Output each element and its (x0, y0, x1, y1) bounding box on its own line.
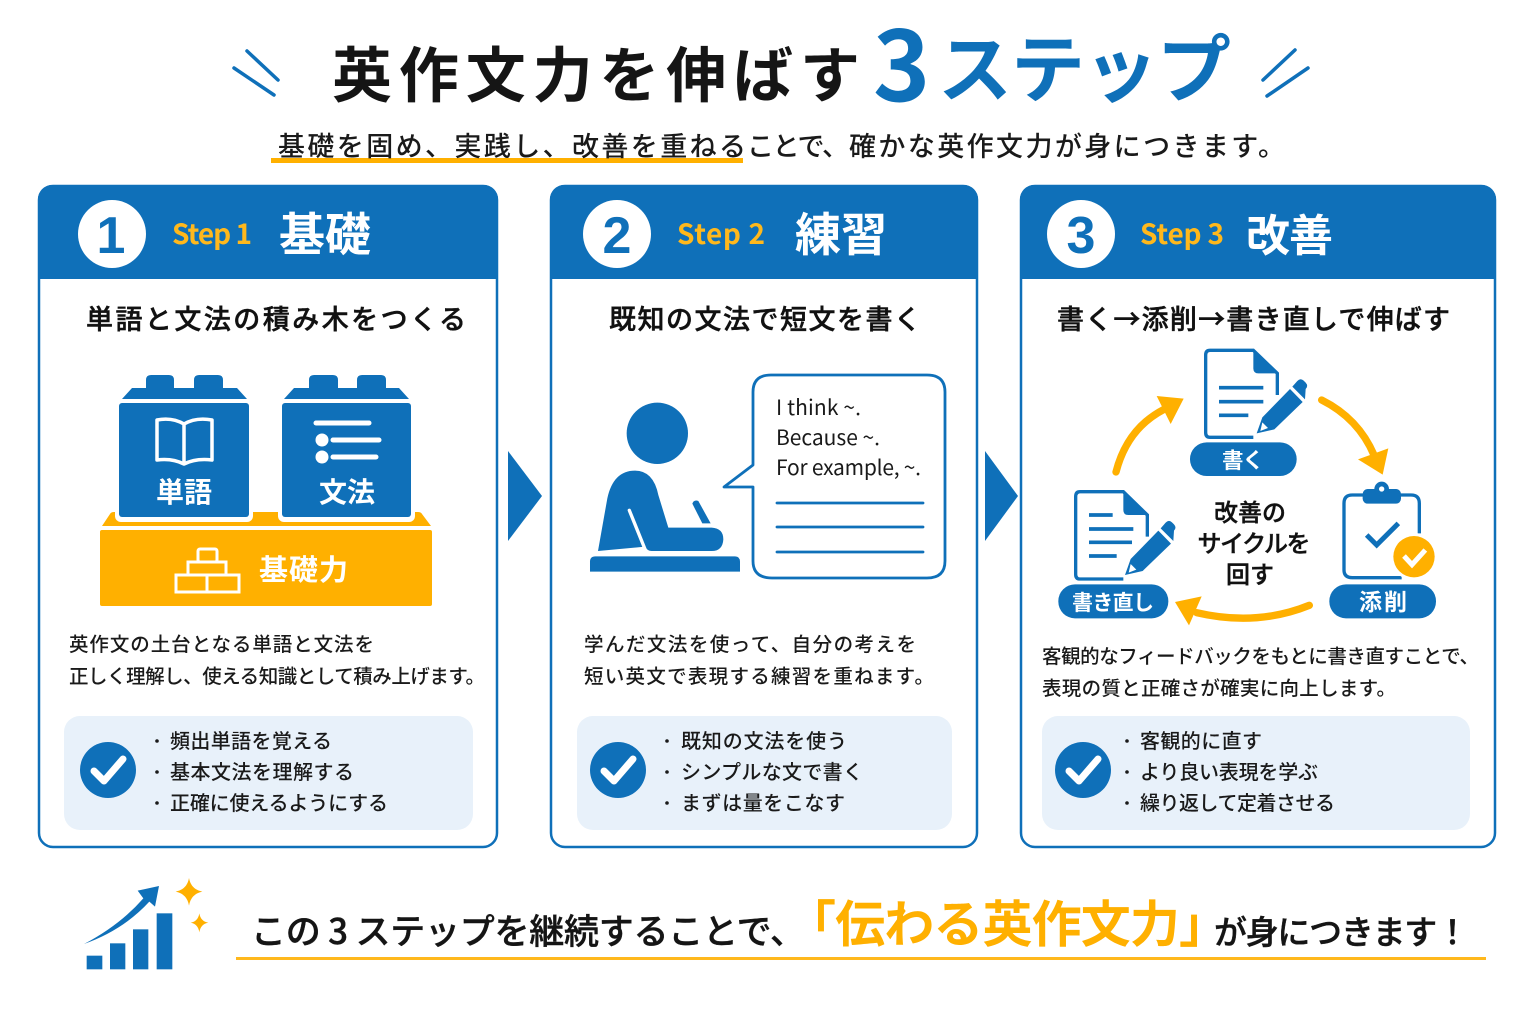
step 2 header band (550, 185, 978, 279)
icon: growth chart with sparkles (84, 878, 208, 969)
step 1 description: 正しく理解し、使える知識として積み上げます。 (69, 660, 485, 689)
checklist items: 繰り返して定着させる (1140, 787, 1335, 816)
step 1 description (69, 628, 485, 689)
step 3 number badge: 3 (1067, 207, 1095, 265)
footer (84, 878, 1486, 969)
subtitle text: ことで、 (747, 125, 849, 164)
checklist items: 正確に使えるようにする (170, 787, 388, 816)
step 1 card outline (39, 186, 497, 847)
base block (100, 512, 432, 606)
person writing illustration (590, 375, 945, 578)
title: right accent lines (1263, 50, 1308, 96)
checklist items (1125, 725, 1335, 816)
step 1 number badge: 1 (97, 207, 125, 265)
icon: check circle (1055, 742, 1111, 798)
arrow: step 2 to step 3 (985, 451, 1018, 541)
cycle centre text: サイクルを (1198, 524, 1310, 559)
pill label: write: 書く (1222, 444, 1264, 475)
step 2 subheading: 既知の文法で短文を書く (609, 298, 921, 337)
step 2 description: 短い英文で表現する練習を重ねます。 (584, 660, 934, 689)
title: left accent lines (234, 51, 278, 95)
icon: check circle (80, 742, 136, 798)
step 3 description: 客観的なフィードバックをもとに書き直すことで、 (1042, 640, 1479, 669)
improvement cycle diagram (1058, 350, 1438, 625)
step 2 checklist (577, 716, 952, 830)
checklist items: 既知の文法を使う (681, 725, 847, 754)
grammar block (278, 375, 415, 522)
checklist items (155, 725, 388, 816)
checklist items: シンプルな文で書く (681, 756, 863, 785)
subtitle underline (271, 158, 743, 163)
bubble sentences: Because ~. (776, 422, 880, 452)
step 2 card outline (551, 186, 977, 847)
step 3 header band (1020, 185, 1496, 279)
arrow: rewrite to write (1116, 396, 1184, 472)
cycle centre text (1198, 493, 1310, 590)
speech bubble (724, 375, 945, 578)
icon: book (157, 419, 212, 464)
pill label: review: 添削 (1359, 583, 1407, 617)
bubble sentences (776, 392, 921, 482)
title (234, 0, 1308, 129)
step 3 description: 表現の質と正確さが確実に向上します。 (1042, 672, 1396, 701)
step 1 checklist (64, 716, 473, 830)
step 1 header band (38, 185, 498, 279)
building blocks illustration (100, 375, 432, 606)
step 3 heading: 改善 (1246, 200, 1333, 264)
panel: step 2 (550, 185, 978, 847)
word label: 単語 (156, 471, 212, 511)
pill label: rewrite: 書き直し (1072, 587, 1154, 617)
icon: review clipboard (1344, 482, 1438, 580)
step 1 description: 英作文の土台となる単語と文法を (69, 628, 374, 657)
arrow: step 1 to step 2 (508, 451, 542, 541)
icon: write document (1206, 350, 1307, 437)
step 1 label: Step 1 (172, 213, 252, 253)
pill: rewrite (1058, 584, 1168, 618)
step 3 checklist (1042, 716, 1470, 830)
footer underline (236, 957, 1486, 960)
person figure (590, 403, 740, 572)
pill: review (1329, 584, 1436, 618)
footer text: highlight: 「伝わる英作文力」 (786, 885, 1229, 957)
subtitle text: 基礎を固め、実践し、改善を重ねる (278, 125, 746, 164)
step 2 label: Step 2 (677, 213, 765, 253)
arrow: write to review (1322, 400, 1388, 475)
footer text: lead: この 3 ステップを継続することで、 (251, 904, 805, 955)
panel: step 3 (1020, 185, 1496, 847)
subtitle text: 確かな英作文力が身につきます。 (849, 125, 1285, 164)
step 1 subheading: 単語と文法の積み木をつくる (86, 298, 466, 337)
checklist items: まずは量をこなす (681, 787, 845, 816)
step 3 subheading: 書く→添削→書き直しで伸ばす (1057, 298, 1450, 337)
arrow: review to rewrite (1175, 596, 1309, 625)
checklist items: 客観的に直す (1140, 725, 1262, 754)
step 3 description (1042, 640, 1479, 701)
icon: stacked bricks (176, 549, 239, 592)
grammar label: 文法 (319, 471, 375, 511)
foundation label: 基礎力 (259, 547, 348, 589)
bubble sentences: I think ~. (776, 392, 861, 422)
subtitle (271, 125, 1285, 164)
panel: step 1 (38, 185, 498, 847)
step 2 number badge (583, 200, 651, 268)
cycle centre text: 改善の (1214, 493, 1286, 528)
step 3 card outline (1021, 186, 1495, 847)
step 1 heading: 基礎 (279, 199, 371, 265)
cycle centre text: 回す (1226, 555, 1274, 590)
icon: rewrite document (1076, 492, 1175, 579)
step 3 number badge (1047, 200, 1115, 268)
bubble sentences: For example, ~. (776, 452, 921, 482)
checklist items: 頻出単語を覚える (170, 725, 332, 754)
step 2 description: 学んだ文法を使って、自分の考えを (584, 628, 916, 657)
checklist items: より良い表現を学ぶ (1140, 756, 1318, 785)
checklist items (665, 725, 863, 816)
bubble blank lines (777, 503, 923, 552)
subtitle text (278, 125, 1285, 164)
pill: write (1190, 442, 1297, 476)
icon: grammar list (316, 423, 379, 461)
step 2 heading: 練習 (795, 199, 887, 265)
step 2 description (584, 628, 934, 689)
step 2 number badge: 2 (603, 207, 631, 265)
icon: check circle (590, 742, 646, 798)
step 1 number badge (78, 200, 146, 268)
footer text: closing: が身につきます！ (1214, 906, 1469, 954)
checklist items: 基本文法を理解する (170, 756, 354, 785)
word block (115, 375, 253, 522)
title: blue katakana: ステップ (938, 11, 1231, 118)
step 3 label: Step 3 (1140, 213, 1224, 253)
title: black text: 英作文力を伸ばす (332, 28, 860, 115)
